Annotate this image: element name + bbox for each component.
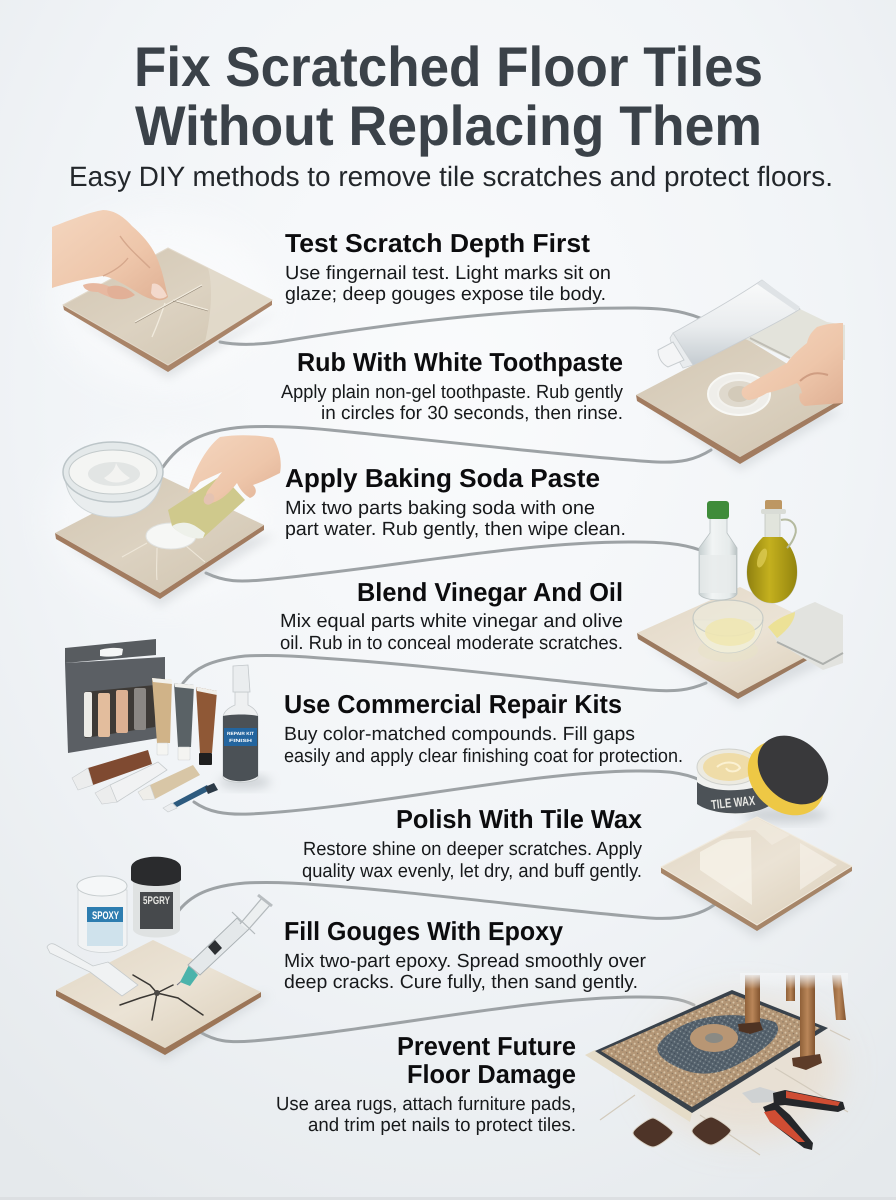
- step 4 description: [280, 611, 623, 654]
- step 5 illustration: repair kit box, tubes and spray: REPAIR KIT: [227, 731, 254, 736]
- step 8 heading: [397, 1031, 576, 1089]
- step 2 description: [281, 382, 623, 424]
- step 8 illustration: rug, furniture legs, pads, nail clippers: [585, 973, 850, 1155]
- title: [134, 35, 763, 157]
- step 1 description: [285, 263, 611, 305]
- step 7 description: deep cracks. Cure fully, then sand gently.: [284, 972, 638, 993]
- step 5 description: [284, 724, 683, 767]
- title: Fix Scratched Floor Tiles: [134, 35, 763, 98]
- step 6 heading: Polish With Tile Wax: [396, 804, 643, 834]
- step 5 description: Buy color-matched compounds. Fill gaps: [284, 724, 635, 745]
- step 6 illustration: wax tin, sponge and glossy tile: [661, 722, 852, 938]
- step 7 illustration: tile with crack, epoxy jars, spatula, syringe: SPOXY: [92, 910, 119, 922]
- step 4 illustration: tile, bottles, bowl, cloth: [637, 500, 843, 705]
- step 7: epoxy: [47, 857, 647, 1060]
- step 2 description: in circles for 30 seconds, then rinse.: [321, 403, 623, 424]
- step 8 description: [276, 1094, 576, 1136]
- step 6 description: quality wax evenly, let dry, and buff gently.: [302, 861, 642, 882]
- step 2 description: Apply plain non-gel toothpaste. Rub gently: [281, 382, 623, 403]
- step 2 illustration: tile, tube, towel, finger: [636, 280, 845, 470]
- connectors between steps: [163, 308, 714, 1042]
- step 1 description: glaze; deep gouges expose tile body.: [285, 284, 606, 305]
- step 4 heading: Blend Vinegar And Oil: [357, 577, 623, 607]
- step 7 description: Mix two-part epoxy. Spread smoothly over: [284, 951, 647, 972]
- step 8: prevent damage: [276, 973, 850, 1155]
- step 1 heading: Test Scratch Depth First: [285, 228, 590, 258]
- step 7 illustration: tile with crack, epoxy jars, spatula, syringe: [47, 857, 272, 1060]
- subtitle: Easy DIY methods to remove tile scratches and protect floors.: [69, 161, 833, 192]
- step 3 illustration: tile, bowl, sponge, hand: [55, 435, 281, 606]
- step 5 description: easily and apply clear finishing coat for protection.: [284, 746, 683, 767]
- step 3 description: Mix two parts baking soda with one: [285, 498, 595, 519]
- step 1 illustration: tile with hand: [52, 210, 280, 378]
- step 6: tile wax: [302, 722, 852, 938]
- step 8 description: Use area rugs, attach furniture pads,: [276, 1094, 576, 1115]
- step 5 heading: Use Commercial Repair Kits: [284, 689, 622, 719]
- step 6 description: [302, 839, 642, 882]
- step 1 description: Use fingernail test. Light marks sit on: [285, 263, 611, 284]
- step 4 description: Mix equal parts white vinegar and olive: [280, 611, 623, 632]
- step 3 description: [285, 498, 626, 540]
- step 4 description: oil. Rub in to conceal moderate scratches.: [280, 633, 623, 654]
- step 2 heading: Rub With White Toothpaste: [297, 347, 623, 377]
- step 5: repair kits: [65, 639, 683, 812]
- step 1: test scratch depth: [52, 210, 611, 378]
- step 4: vinegar and oil: [280, 500, 843, 705]
- title: Without Replacing Them: [135, 94, 762, 157]
- step 7 heading: Fill Gouges With Epoxy: [284, 916, 564, 946]
- step 3: baking soda: [55, 435, 626, 606]
- step 3 description: part water. Rub gently, then wipe clean.: [285, 519, 626, 540]
- step 2: toothpaste: [281, 280, 845, 470]
- step 8 heading: Prevent Future: [397, 1031, 576, 1061]
- step 8 description: and trim pet nails to protect tiles.: [308, 1115, 576, 1136]
- step 6 illustration: wax tin, sponge and glossy tile: TILE WAX: [710, 793, 756, 812]
- step 3 heading: Apply Baking Soda Paste: [285, 463, 600, 493]
- step 7 description: [284, 951, 647, 993]
- step 7 illustration: tile with crack, epoxy jars, spatula, syringe: 5PGRY: [143, 895, 170, 907]
- step 5 illustration: repair kit box, tubes and spray: [65, 639, 271, 812]
- step 6 description: Restore shine on deeper scratches. Apply: [303, 839, 642, 860]
- step 5 illustration: repair kit box, tubes and spray: FINISH: [229, 738, 252, 743]
- step 8 heading: Floor Damage: [407, 1059, 576, 1089]
